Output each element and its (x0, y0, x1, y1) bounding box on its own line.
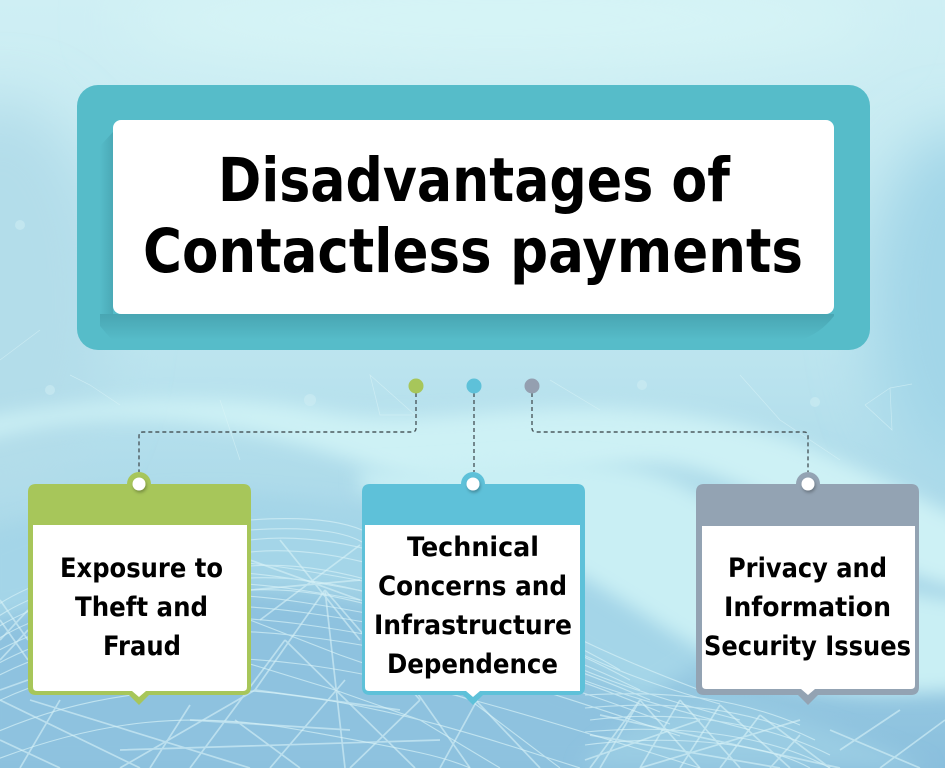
knob (461, 472, 485, 496)
card label: Infrastructure (374, 610, 572, 641)
panel: technical concerns (362, 472, 585, 705)
constellation details (0, 220, 912, 460)
panel: privacy and information security (696, 472, 919, 705)
card label: Technical (407, 532, 539, 563)
panel: exposure to theft and fraud (28, 472, 251, 705)
card label: Concerns and (378, 571, 567, 602)
panel: title (77, 85, 870, 350)
card label: Theft and (75, 592, 208, 623)
card label: Exposure to (60, 553, 223, 584)
mesh triangles (0, 540, 945, 768)
knob (796, 472, 820, 496)
connector: green (139, 378, 424, 472)
card label: Dependence (387, 649, 558, 680)
card frame (362, 484, 585, 705)
card body (365, 525, 580, 697)
connector: blue (466, 378, 482, 472)
title white card (113, 120, 834, 314)
card label: Information (724, 592, 891, 623)
card frame (28, 484, 251, 705)
card body (702, 526, 915, 695)
title: Disadvantages of (218, 145, 731, 216)
title panel shadow (100, 132, 834, 340)
title: Contactless payments (143, 216, 803, 287)
card body (33, 525, 247, 697)
title outer frame (77, 85, 870, 350)
card label: Privacy and (728, 553, 887, 584)
card label: Fraud (103, 631, 181, 662)
knob (127, 472, 151, 496)
card frame (696, 484, 919, 705)
mesh network lines (0, 519, 830, 768)
card label: Security Issues (704, 631, 911, 662)
connector: gray (524, 378, 808, 472)
